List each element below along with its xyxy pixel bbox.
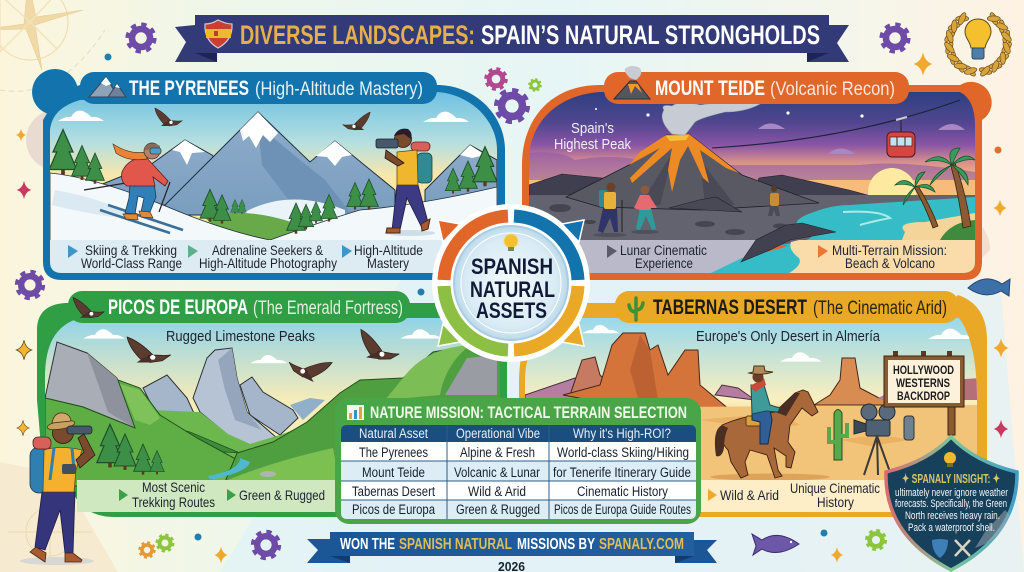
caption strip: High-Altitude: [354, 242, 423, 258]
panel: Mount Teide: [522, 66, 992, 280]
caption strip: Experience: [635, 255, 693, 271]
caption strip: Trekking Routes: [132, 494, 215, 510]
scene: limestone peaks: [40, 316, 505, 486]
table: Wild & Arid: [468, 484, 526, 499]
panel: Tabernas Desert: [519, 291, 987, 517]
sign: Hollywood Westerns Backdrop: HOLLYWOOD: [893, 363, 954, 377]
icon: gondola: [887, 117, 915, 157]
heading pill: (The Cinematic Arid): [813, 298, 947, 319]
centre hub: Spanish Natural Assets: ASSETS: [476, 298, 547, 323]
heading pill: MOUNT TEIDE: [655, 77, 765, 100]
icon: eagle right: [343, 112, 370, 130]
figure: horse and rider: [715, 366, 818, 478]
heading pill: [604, 66, 909, 104]
footer banner: WON THE: [340, 536, 395, 553]
icon: small green gear: [529, 79, 541, 91]
icon: small volcano: [614, 66, 650, 99]
table panel: tactical terrain selection: NATURE MISSION: TACTICAL TERRAIN SELECTION: [370, 403, 687, 422]
icon: purple gear top left: [127, 24, 155, 52]
table panel: tactical terrain selection: [335, 398, 701, 524]
caption strip: Skiing & Trekking: [85, 242, 177, 258]
caption strip: Green & Rugged: [239, 487, 325, 503]
heading pill: (High-Altitude Mastery): [255, 79, 423, 100]
title banner: SPAIN’S NATURAL STRONGHOLDS: [481, 20, 820, 50]
insight shield: Pack a waterproof shell.: [908, 522, 995, 534]
icon: Spanish shield: [205, 20, 232, 48]
heading pill: [615, 291, 959, 323]
caption strip: [77, 479, 340, 512]
footer banner: [307, 532, 717, 563]
icon: purple gear centre: [496, 90, 528, 122]
insight shield: [886, 437, 1017, 570]
caption strip: World-Class Range: [81, 255, 182, 271]
title banner: [175, 15, 849, 62]
panel: The Pyrenees: [32, 69, 510, 280]
table: Natural Asset: [359, 426, 428, 441]
icon: blue fish: [968, 279, 1010, 296]
centre hub: Spanish Natural Assets: SPANISH: [471, 254, 553, 279]
title banner: DIVERSE LANDSCAPES:: [240, 20, 475, 50]
sign: Hollywood Westerns Backdrop: BACKDROP: [897, 389, 950, 403]
text: Europe's Only Desert in Almería: Europe's Only Desert in Almería: [696, 328, 881, 345]
table: The Pyrenees: [359, 445, 428, 460]
table: Why it's High-ROI?: [573, 426, 671, 441]
icon: purple gear left: [17, 272, 43, 298]
caption strip: Multi-Terrain Mission:: [832, 242, 947, 258]
icon: bar chart: [347, 405, 364, 420]
footer banner: SPANALY.COM: [599, 536, 684, 553]
figure: second hiker: [631, 186, 659, 234]
icon: movie camera: [854, 404, 914, 475]
caption strip: High-Altitude Photography: [199, 255, 337, 271]
arc arrow: orange: [438, 216, 508, 280]
panel frame: [522, 82, 992, 280]
table: [341, 425, 696, 519]
table: Mount Teide: [362, 465, 425, 480]
caption strip: Wild & Arid: [720, 487, 779, 503]
sign: Hollywood Westerns Backdrop: [884, 351, 964, 435]
arc arrow: yellow: [514, 286, 584, 350]
icon: purple fish: [752, 534, 799, 555]
panel frame: [519, 295, 987, 517]
table: World-class Skiing/Hiking: [557, 445, 689, 460]
icon: bulb: [504, 234, 518, 251]
table: Operational Vibe: [456, 426, 540, 441]
icon: eagle: [155, 108, 182, 126]
icon: laurel and light bulb: [943, 12, 1013, 78]
centre hub: Spanish Natural Assets: [432, 204, 590, 362]
cable car line: [712, 100, 960, 148]
icon: small shield: [932, 539, 948, 558]
figure: distant hiker: [768, 186, 780, 216]
heading pill: [80, 72, 437, 104]
icon: magenta gear: [486, 69, 506, 89]
arc arrow: green: [438, 286, 508, 350]
icon: palm trees: [895, 148, 975, 228]
caption strip: Most Scenic: [142, 479, 205, 495]
heading pill: (The Emerald Fortress): [253, 298, 403, 319]
icon: eagles soaring: [127, 329, 402, 386]
icon: mountains: [89, 77, 126, 97]
table: for Tenerife Itinerary Guide: [553, 465, 691, 480]
caption strip: Adrenaline Seekers &: [212, 242, 324, 258]
icon: green gear bottom right: [866, 530, 886, 550]
icon: orange gear: [139, 542, 155, 558]
text: Spain's Highest Peak: [554, 120, 631, 153]
table: Cinematic History: [577, 484, 668, 499]
panel: Picos de Europa: [37, 291, 507, 517]
panel frame: [37, 303, 507, 517]
caption strip: [607, 242, 947, 271]
caption strip: History: [817, 494, 854, 510]
icon: bulb: [944, 452, 956, 467]
footer banner: SPANISH NATURAL: [399, 536, 512, 553]
heading pill: PICOS DE EUROPA: [108, 296, 248, 319]
icon: eagle: [73, 297, 104, 318]
icon: purple gear top right: [881, 24, 909, 52]
heading pill: THE PYRENEES: [129, 77, 249, 100]
caption strip: [700, 480, 900, 512]
caption strip: Beach & Volcano: [845, 255, 935, 271]
panel frame: [32, 69, 505, 280]
icon: crossed swords: [955, 540, 970, 556]
text: Spain's Highest Peak: Spain's: [571, 120, 614, 137]
table: Picos de Europa Guide Routes: [554, 502, 691, 517]
figure: hiker with binoculars: [20, 413, 95, 565]
table: Picos de Europa: [352, 502, 435, 517]
caption strip: Mastery: [367, 255, 409, 271]
caption strip: Unique Cinematic: [790, 480, 880, 496]
figure: skier: [84, 143, 183, 233]
icon: purple gear bottom: [253, 532, 279, 558]
centre hub: Spanish Natural Assets: NATURAL: [470, 277, 555, 302]
heading pill: (Volcanic Recon): [770, 79, 895, 100]
scene: volcano and beach: [525, 90, 980, 274]
caption strip: Lunar Cinematic: [620, 242, 707, 258]
table: Volcanic & Lunar: [454, 465, 540, 480]
heading pill: TABERNAS DESERT: [653, 296, 807, 319]
scene: desert mesas: [520, 316, 980, 486]
sign: Hollywood Westerns Backdrop: WESTERNS: [896, 376, 950, 390]
table: Alpine & Fresh: [460, 445, 535, 460]
arc arrow: blue: [514, 216, 584, 280]
icon: green gear: [157, 535, 173, 551]
footer banner: MISSIONS BY: [517, 536, 595, 553]
heading pill: [68, 291, 410, 323]
icon: cactus: [629, 298, 643, 320]
caption strip: [50, 240, 497, 273]
icon: compass rose: [0, 0, 105, 91]
text: Spain's Highest Peak: Highest Peak: [554, 136, 631, 153]
scene: snowy mountains: [50, 92, 497, 240]
figure: hiker with backpack: [593, 182, 627, 237]
text: Rugged Limestone Peaks: Rugged Limestone Peaks: [166, 328, 315, 345]
table: Green & Rugged: [456, 502, 540, 517]
icon: cactus: [829, 410, 847, 460]
table: Tabernas Desert: [352, 484, 435, 499]
figure: photographer: [376, 129, 435, 236]
